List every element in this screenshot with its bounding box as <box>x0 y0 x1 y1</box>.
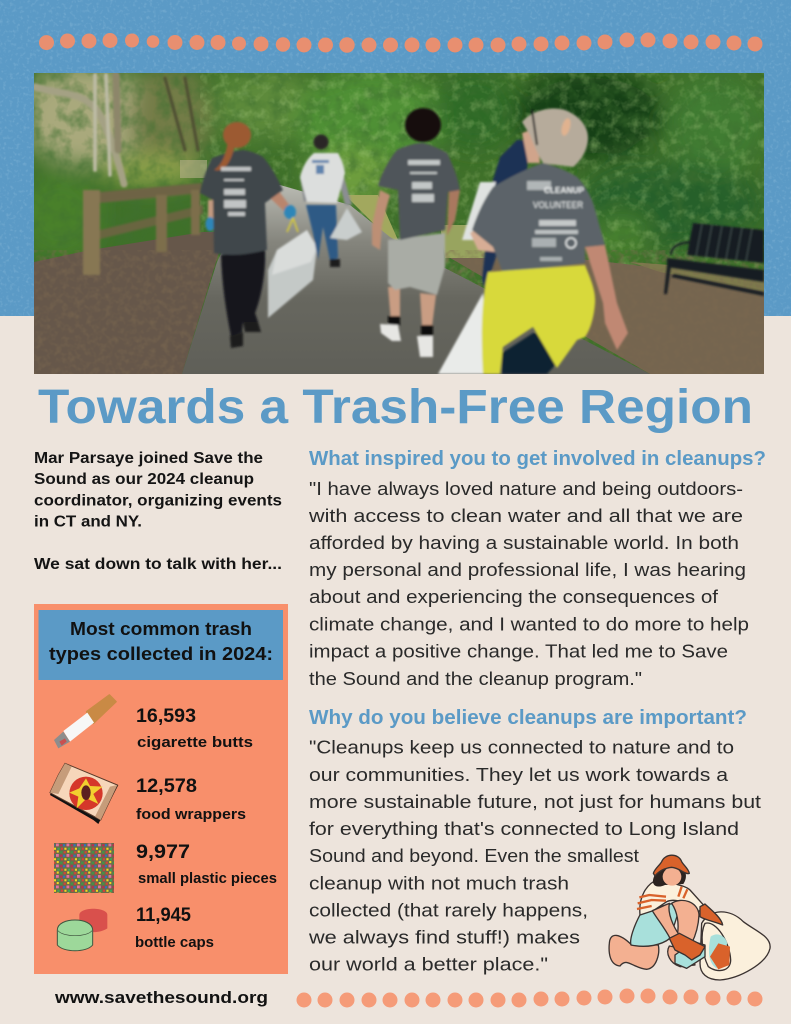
shirt lettering <box>527 181 585 261</box>
stat: small plastic pieces <box>136 842 277 887</box>
answer two: more sustainable future, not just for humans but <box>309 792 761 812</box>
volunteer 5: woman with yellow sweater <box>470 108 628 374</box>
answer one: the Sound and the cleanup program." <box>309 669 642 689</box>
answer two: we always find stuff!) makes <box>308 928 580 948</box>
intro text: coordinator, organizing events <box>34 492 282 510</box>
answer two: Sound and beyond. Even the smallest <box>309 846 639 866</box>
intro text <box>34 450 282 573</box>
stat: small plastic pieces: small plastic pieces <box>138 871 277 887</box>
panel heading: types collected in 2024: <box>49 643 273 664</box>
answer two: our communities. They let us work towards a <box>309 765 729 785</box>
ground <box>34 232 225 374</box>
shirt lettering: VOLUNTEER <box>533 200 583 211</box>
icon: cigarette butt <box>54 695 116 748</box>
answer one <box>308 479 749 689</box>
white trash bag <box>438 293 488 374</box>
answer one: "I have always loved nature and being outdoors- <box>309 479 743 499</box>
bench <box>664 223 764 296</box>
stat: bottle caps: bottle caps <box>135 935 214 951</box>
answer two: cleanup with not much trash <box>309 874 569 894</box>
stat: bottle caps <box>135 905 214 951</box>
volunteer 1: woman in dark shirt <box>200 122 296 348</box>
answer two: collected (that rarely happens, <box>309 900 588 920</box>
stat: food wrappers: food wrappers <box>136 807 246 823</box>
intro text: Sound as our 2024 cleanup <box>34 471 254 488</box>
distant railing <box>180 160 207 178</box>
answer two: our world a better place." <box>309 954 548 974</box>
wooden fence <box>83 183 203 275</box>
illustration: volunteer bagging trash <box>609 855 770 980</box>
main title: Towards a Trash-Free Region <box>38 381 753 434</box>
panel: most common trash types <box>34 604 288 974</box>
paved path <box>182 185 650 374</box>
shirt lettering: CLEANUP <box>544 186 585 195</box>
answer one: my personal and professional life, I was hearing <box>309 560 746 580</box>
panel heading: Most common trash <box>70 618 252 639</box>
volunteer 2: man in white shirt <box>300 134 362 267</box>
answer one: with access to clean water and all that we are <box>308 506 743 526</box>
answer two: for everything that's connected to Long Island <box>309 819 739 839</box>
heading: question one: What inspired you to get involved in cleanups? <box>309 448 766 470</box>
trash bag 1 <box>268 218 317 318</box>
answer two: "Cleanups keep us connected to nature and to <box>309 738 734 758</box>
intro text: in CT and NY. <box>34 514 142 530</box>
stat: small plastic pieces: 9,977 <box>136 842 190 863</box>
icon: bottle caps <box>57 909 107 951</box>
panel heading <box>38 610 283 680</box>
stat: bottle caps: 11,945 <box>136 905 191 926</box>
answer one: about and experiencing the consequences of <box>309 587 719 607</box>
answer one: afforded by having a sustainable world. In both <box>309 533 739 553</box>
icon: food wrapper <box>50 763 118 824</box>
intro text: We sat down to talk with her... <box>34 556 282 573</box>
icon: small plastic pieces <box>54 843 114 893</box>
volunteer 3: man with dark curly hair <box>372 108 460 357</box>
stat: cigarette butts: cigarette butts <box>137 735 253 751</box>
answer two <box>308 738 761 974</box>
intro text: Mar Parsaye joined Save the <box>34 450 263 467</box>
top row of orange dots <box>39 32 762 53</box>
blue header band <box>0 0 791 316</box>
heading: question two: Why do you believe cleanups are important? <box>309 707 747 729</box>
stat: cigarette butts: 16,593 <box>136 706 196 727</box>
answer one: climate change, and I wanted to do more to help <box>309 614 749 634</box>
stat: food wrappers <box>136 776 246 823</box>
stat: food wrappers: 12,578 <box>136 776 197 797</box>
volunteer 4: person in navy jacket <box>482 140 530 290</box>
website address: www.savethesound.org <box>54 988 268 1007</box>
tree trunks <box>35 75 198 184</box>
answer one: impact a positive change. That led me to Save <box>309 642 728 662</box>
bottom row of orange dots <box>296 988 762 1008</box>
stat: cigarette butts <box>136 706 253 751</box>
photo: volunteers walking on a wooded path <box>18 65 765 374</box>
